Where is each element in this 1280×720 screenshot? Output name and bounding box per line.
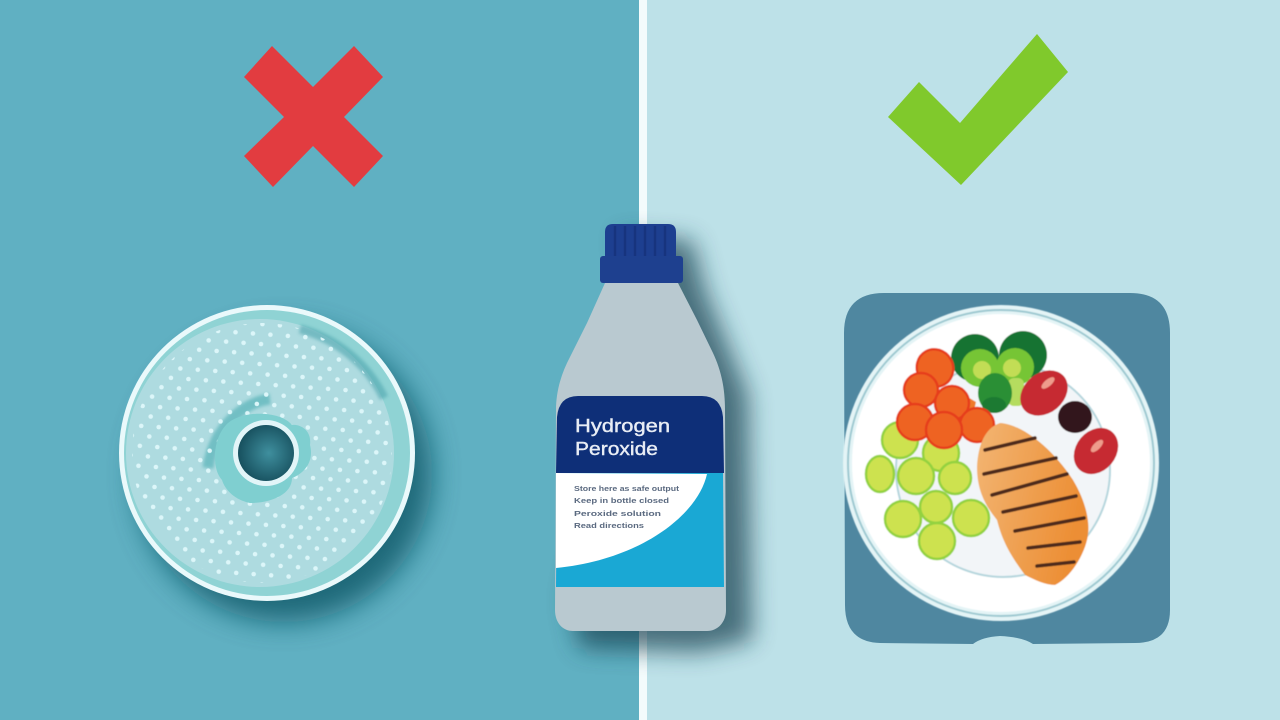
label small print (574, 484, 680, 530)
bottle label: Peroxide (575, 439, 658, 459)
panel: right background (647, 0, 1280, 720)
label small print: Store here as safe output (574, 484, 680, 493)
bottle cap (600, 224, 683, 283)
icon: hydrogen peroxide bottle (555, 224, 752, 652)
hub (215, 414, 311, 503)
tomatoes and olive (1011, 361, 1127, 483)
icon: red cross (244, 46, 383, 187)
carrots (897, 343, 994, 448)
bottle label (556, 396, 724, 587)
label small print: Peroxide solution (574, 509, 662, 518)
grilled chicken (977, 423, 1088, 585)
cucumbers (866, 422, 989, 559)
panel: left background (0, 0, 640, 720)
icon: green check (888, 34, 1068, 185)
icon: mouth guard disc (119, 305, 432, 622)
broccoli (951, 331, 1047, 413)
panel: plate tray (844, 293, 1170, 644)
label heading: Hydrogen (575, 416, 670, 436)
label small print: Keep in bottle closed (574, 496, 670, 505)
icon: plate of food (843, 305, 1159, 621)
bottle body (555, 283, 726, 631)
label small print: Read directions (574, 521, 644, 530)
